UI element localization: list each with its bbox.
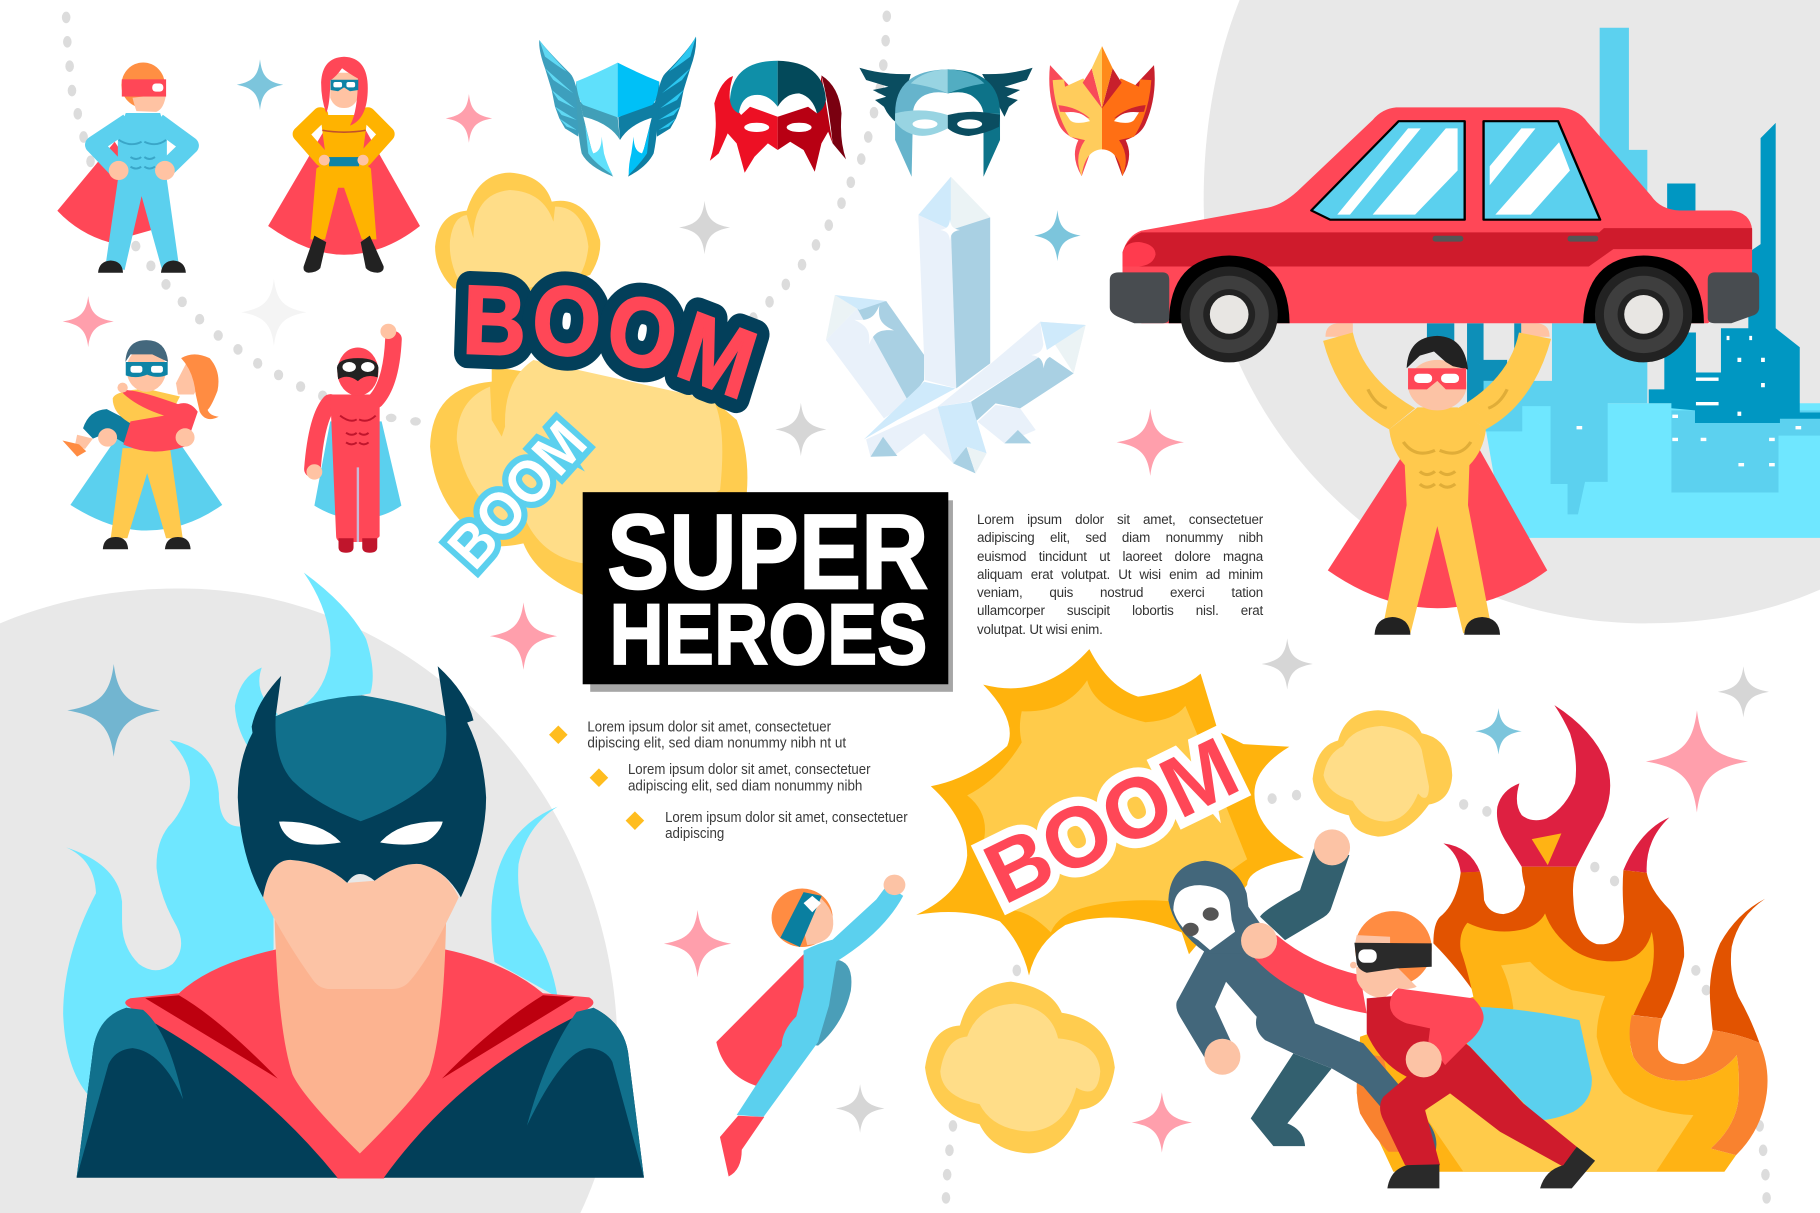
blue flames xyxy=(63,573,558,1095)
hero: flying xyxy=(716,875,905,1176)
smoke cloud: lower xyxy=(925,982,1115,1153)
car bumpers xyxy=(1110,272,1759,323)
intro paragraph: euismod tincidunt ut laoreet dolore magna xyxy=(977,548,1263,564)
background shape: bottom left grey xyxy=(0,589,618,1213)
word: BOOM large xyxy=(461,263,768,420)
hero: carrying woman xyxy=(62,340,222,549)
word: BOOM in burst: BOOM xyxy=(970,719,1252,922)
intro paragraph: adipiscing elit, sed diam nonummy nibh xyxy=(977,530,1263,545)
smoke cloud: top xyxy=(435,173,600,293)
hero: lifting car xyxy=(1323,323,1551,635)
outline layer: BOOM xyxy=(461,263,768,420)
intro paragraph: Lorem ipsum dolor sit amet, consectetuer xyxy=(977,512,1263,527)
bullet 1: dipiscing elit, sed diam nonummy nibh nt ut xyxy=(587,736,846,752)
mask: winged blue helmet xyxy=(539,37,696,177)
crimson flame tips xyxy=(1443,705,1669,873)
smoke cloud: right xyxy=(1313,710,1452,837)
explosion burst xyxy=(916,649,1304,975)
bullet 3 xyxy=(626,810,908,842)
bullet 3: adipiscing xyxy=(665,826,724,842)
intro paragraph: volutpat. Ut wisi enim. xyxy=(977,622,1103,636)
right wing xyxy=(655,37,696,137)
bullet 2: adipiscing elit, sed diam nonummy nibh xyxy=(628,778,862,794)
masked hero portrait with blue flames xyxy=(63,573,644,1179)
dark cloak xyxy=(77,1008,644,1178)
hero: woman in yellow xyxy=(268,57,420,273)
title text: SUPER: SUPER xyxy=(607,492,929,612)
light inner flame xyxy=(1423,962,1693,1172)
intro paragraph xyxy=(977,512,1264,637)
crystals xyxy=(826,177,1086,473)
villain: skull xyxy=(1168,829,1436,1153)
fire xyxy=(1357,705,1768,1172)
hero: blue suit standing xyxy=(57,62,190,273)
intro paragraph: ullamcorper suscipit lobortis nisl. erat xyxy=(977,603,1263,618)
orange flame sides xyxy=(1630,1015,1768,1155)
bullet list xyxy=(549,719,908,842)
bullet 1 xyxy=(549,719,846,752)
letter layer: BOOM xyxy=(461,263,768,420)
intro paragraph: veniam, quis nostrud exerci tation xyxy=(977,585,1263,600)
face xyxy=(263,860,459,989)
hero: fighting with black mask xyxy=(1241,911,1595,1188)
red collar xyxy=(125,949,593,1179)
dark orange flames xyxy=(1433,867,1684,1023)
car xyxy=(1110,107,1759,362)
bat mask xyxy=(238,666,486,897)
car wheels xyxy=(1169,255,1704,362)
bullet 2 xyxy=(590,762,871,794)
car windows xyxy=(1311,121,1600,220)
mask: flame xyxy=(1049,46,1155,176)
car body xyxy=(1123,107,1752,323)
bullet 1: Lorem ipsum dolor sit amet, consectetuer xyxy=(587,719,831,735)
mask: teal with wings xyxy=(859,68,1033,177)
title box xyxy=(583,492,953,692)
bullet 3: Lorem ipsum dolor sit amet, consectetuer xyxy=(665,810,908,826)
intro paragraph: aliquam erat volutpat. Ut wisi enim ad minim xyxy=(977,567,1263,582)
hero fight cape xyxy=(1467,1007,1592,1120)
word: BOOM small blue: BOOM xyxy=(435,408,599,581)
neck xyxy=(274,914,446,1154)
hero: red suit raising arm xyxy=(306,324,401,553)
bullet 2: Lorem ipsum dolor sit amet, consectetuer xyxy=(628,762,871,778)
background shape: top right grey xyxy=(1204,0,1820,623)
yellow flame xyxy=(1357,913,1739,1172)
title text: HEROES: HEROES xyxy=(609,587,927,683)
smoke cloud: large xyxy=(430,360,747,600)
city skyline xyxy=(1427,28,1820,538)
left wing xyxy=(539,40,580,137)
mask: red and teal xyxy=(710,61,846,173)
